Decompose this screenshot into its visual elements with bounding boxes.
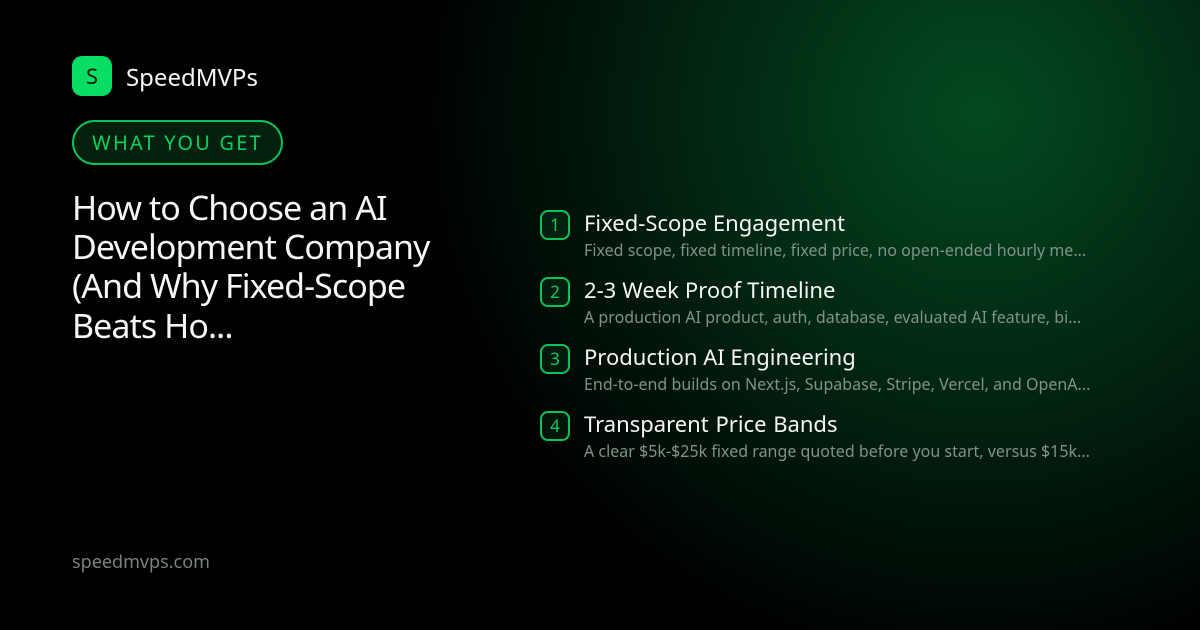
number badge 4: 4 [550,414,560,437]
logo badge [72,56,112,96]
title [72,184,430,348]
item 2 heading: 2-3 Week Proof Timeline [584,275,835,305]
item 2 description: A production AI product, auth, database, evaluated AI feature, bi... [584,306,1081,328]
title: Development Company [72,223,429,269]
title: (And Why Fixed-Scope [72,262,405,308]
number badge 4 [540,411,570,441]
number badge 3: 3 [550,347,560,370]
title: How to Choose an AI [72,184,387,230]
number badge 2 [540,277,570,307]
title: Beats Ho... [72,302,233,348]
number badge 3 [540,344,570,374]
logo badge: S [86,61,98,91]
item 4 heading: Transparent Price Bands [584,409,838,439]
footer url: speedmvps.com [72,550,210,574]
item 3 heading: Production AI Engineering [584,342,856,372]
item 4 description: A clear $5k-$25k fixed range quoted before you start, versus $15k... [584,440,1090,462]
number badge 1 [540,210,570,240]
number badge 1: 1 [550,213,560,236]
brand name: SpeedMVPs [126,61,258,94]
item 3 description: End-to-end builds on Next.js, Supabase, Stripe, Vercel, and OpenA... [584,373,1090,395]
tag pill: what you get: WHAT YOU GET [92,129,263,156]
tag pill: what you get [72,120,283,165]
number badge 2: 2 [550,280,560,303]
item 1 description: Fixed scope, fixed timeline, fixed price, no open-ended hourly me... [584,239,1086,261]
item 1 heading: Fixed-Scope Engagement [584,208,845,238]
